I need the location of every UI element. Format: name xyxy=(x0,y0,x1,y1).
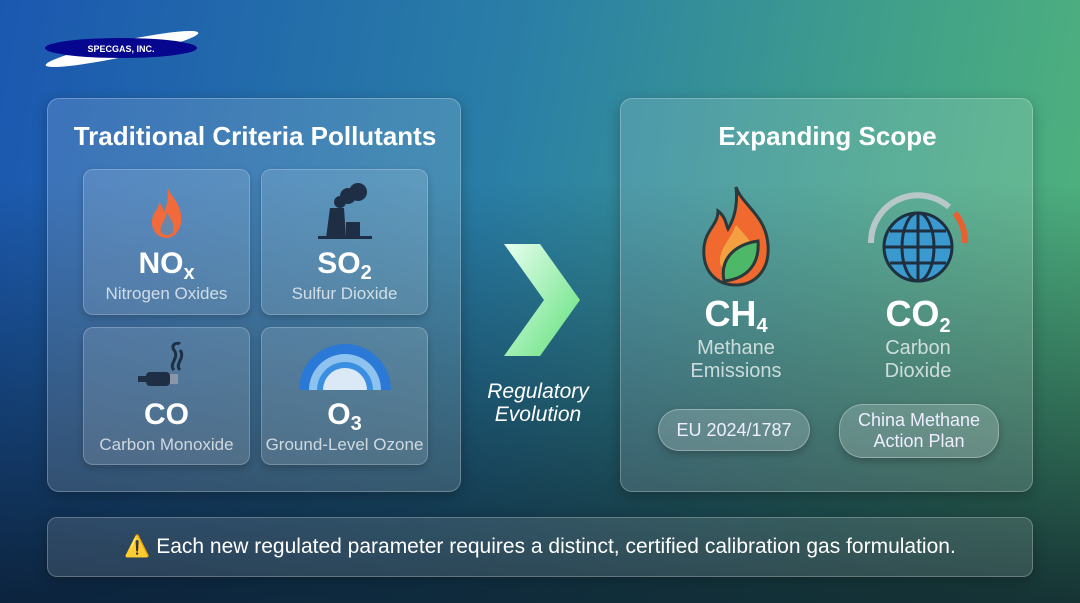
heading: Expanding Scope xyxy=(718,121,937,151)
card: SO2: Sulfur Dioxide xyxy=(292,284,397,303)
arrow: chevron xyxy=(504,244,580,356)
callout: bottom note xyxy=(47,517,1033,577)
item: CH4 xyxy=(690,186,782,382)
icon: exhaust pipe xyxy=(138,342,184,386)
icon: flame xyxy=(152,186,182,238)
item: CO2: Dioxide xyxy=(885,360,951,382)
card: O3 xyxy=(261,327,428,465)
icon: globe with gauge xyxy=(868,192,968,282)
card: NOx xyxy=(83,169,250,315)
card: O3: O3 xyxy=(327,398,362,435)
card: NOx: Nitrogen Oxides xyxy=(106,284,227,303)
item: CO2: CO2 xyxy=(885,293,951,337)
text: regulatory evolution xyxy=(487,380,590,426)
item: CH4: Emissions xyxy=(690,360,782,382)
item: CH4: CH4 xyxy=(704,293,768,337)
panel: traditional criteria pollutants xyxy=(47,98,461,492)
pill: China plan: Action Plan xyxy=(873,431,965,451)
icon: ozone layer xyxy=(299,344,391,390)
pill: EU regulation xyxy=(658,409,810,451)
card: O3: Ground-Level Ozone xyxy=(266,435,423,454)
panel: expanding scope xyxy=(620,98,1033,492)
card: CO xyxy=(83,327,250,465)
item: CO2 xyxy=(868,192,968,382)
pill: China plan: China Methane xyxy=(858,410,980,430)
heading: Traditional Criteria Pollutants xyxy=(74,121,436,151)
card: SO2 xyxy=(261,169,428,315)
card: SO2: SO2 xyxy=(317,247,372,284)
card: NOx: NOx xyxy=(138,247,195,284)
pill: EU regulation: EU 2024/1787 xyxy=(676,420,792,440)
item: CO2: Carbon xyxy=(885,337,951,359)
icon: flame with leaf xyxy=(702,186,770,286)
card: CO: CO xyxy=(144,398,189,431)
card: CO: Carbon Monoxide xyxy=(99,435,234,454)
text: regulatory evolution: Regulatory xyxy=(487,380,589,403)
pill: China plan xyxy=(839,404,999,458)
text: regulatory evolution: Evolution xyxy=(495,403,581,426)
logo: SPECGAS, INC. xyxy=(87,44,155,54)
logo xyxy=(45,31,198,67)
callout: bottom note: ⚠️ Each new regulated parameter requires a distinct, certified calibration gas formulation. xyxy=(124,535,956,558)
icon: factory xyxy=(318,183,372,239)
item: CH4: Methane xyxy=(697,337,775,359)
